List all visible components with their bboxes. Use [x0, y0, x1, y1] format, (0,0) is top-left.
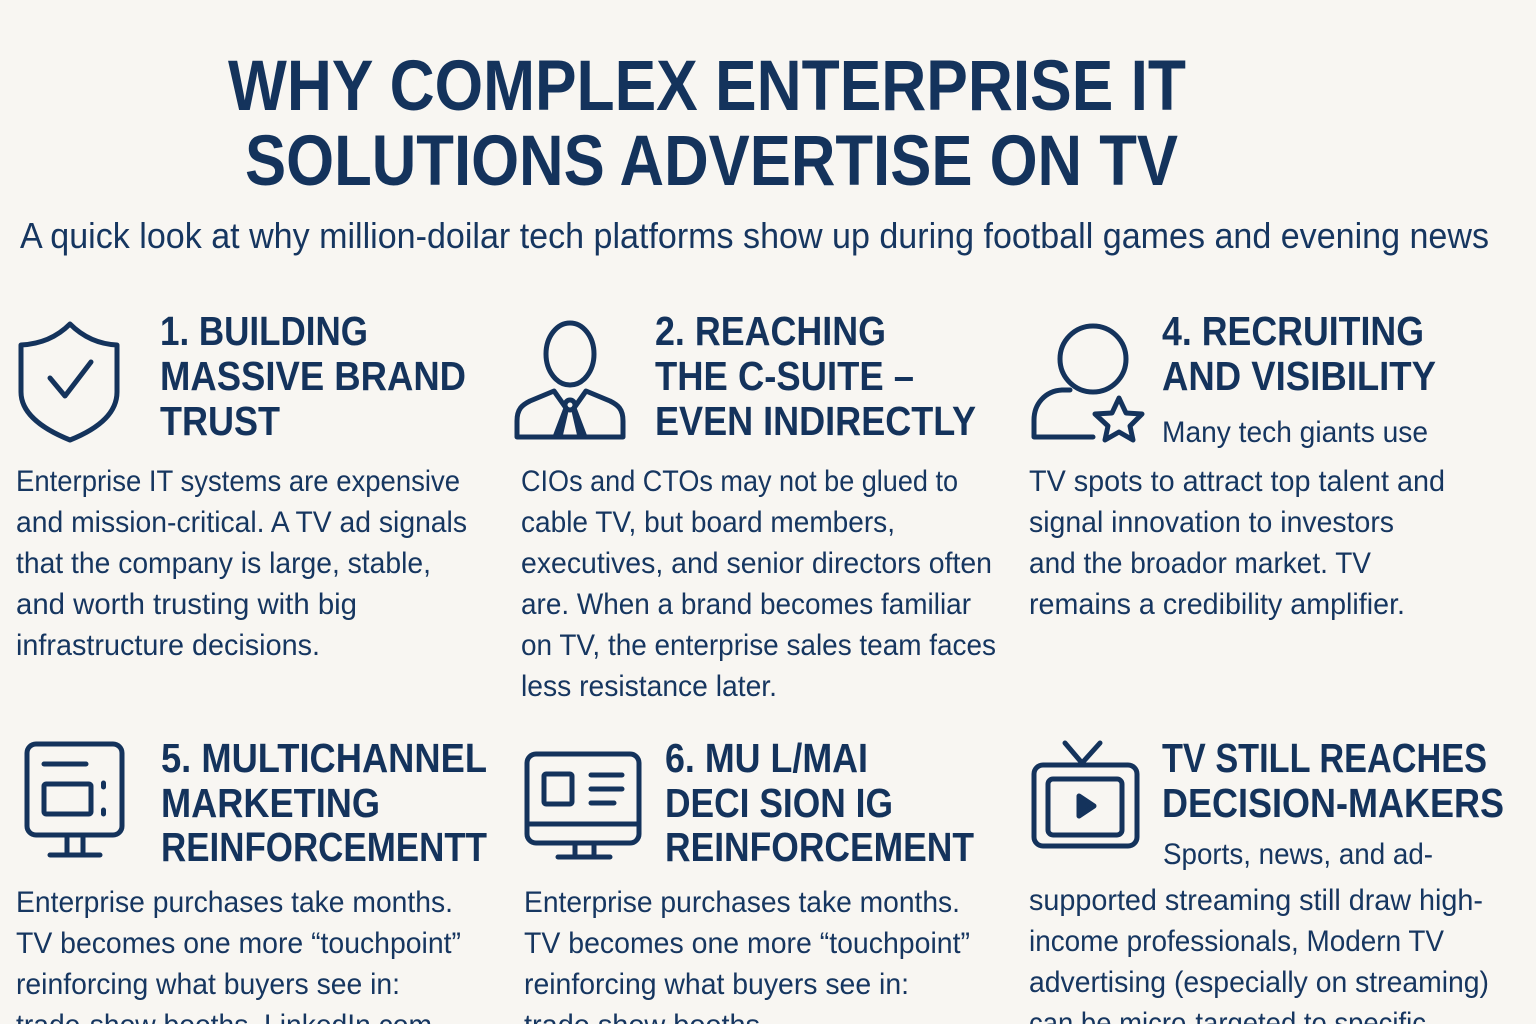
subtitle: A quick look at why million-doilar tech platforms show up during football games and evening news — [20, 215, 1489, 256]
body text 1: infrastructure decisions. — [16, 629, 320, 662]
body text 5: TV becomes one more “touchpoint” — [16, 927, 461, 960]
icon: tv with play button — [1034, 743, 1137, 846]
body text tv: income professionals, Modern TV — [1029, 925, 1444, 958]
heading 5: 5. MULTICHANNEL — [161, 735, 487, 781]
body text tv: supported streaming still draw high- — [1029, 884, 1483, 917]
body text 5: reinforcing what buyers see in: — [16, 968, 400, 1001]
heading 4 — [1162, 308, 1436, 399]
title — [228, 47, 1186, 201]
body text 4 — [1029, 416, 1445, 621]
heading 5 — [161, 735, 487, 870]
heading 2 — [655, 308, 976, 444]
panel: 5 multichannel marketing reinforcement — [16, 735, 487, 1024]
heading tv — [1162, 735, 1504, 826]
heading 2: EVEN INDIRECTLY — [655, 398, 976, 444]
heading 2: 2. REACHING — [655, 308, 886, 354]
body text 1: that the company is large, stable, — [16, 547, 431, 580]
icon: monitor with layout — [27, 744, 122, 855]
body text 2: on TV, the enterprise sales team faces — [521, 629, 996, 662]
panel: tv still reaches decision-makers — [1029, 735, 1504, 1024]
body text 6: reinforcing what buyers see in: — [524, 968, 909, 1001]
body text 4: TV spots to attract top talent and — [1029, 465, 1445, 498]
panel: 2 reaching the c-suite — [517, 308, 996, 703]
body text 4: remains a credibility amplifier. — [1029, 588, 1405, 621]
body text 4: and the broador market. TV — [1029, 547, 1371, 580]
body text 1: and worth trusting with big — [16, 588, 357, 621]
icon: executive with tie — [517, 323, 623, 437]
heading 6: REINFORCEMENT — [665, 824, 974, 870]
body text 6 — [524, 886, 970, 1024]
body text 2: CIOs and CTOs may not be glued to — [521, 465, 958, 498]
icon: person with star — [1034, 326, 1142, 440]
body text 2 — [521, 465, 996, 703]
heading 4: 4. RECRUITING — [1162, 308, 1424, 354]
panel: 4 recruiting and visibility — [1029, 308, 1445, 621]
body text tv: Sports, news, and ad- — [1163, 838, 1433, 871]
heading 6 — [665, 735, 974, 870]
body text tv — [1029, 838, 1489, 1024]
body text tv: advertising (especially on streaming) — [1029, 966, 1489, 999]
heading 1 — [160, 308, 466, 444]
body text 2: are. When a brand becomes familiar — [521, 588, 971, 621]
heading 1: TRUST — [160, 398, 280, 444]
heading 5: REINFORCEMENTT — [161, 824, 487, 870]
heading 1: 1. BUILDING — [160, 308, 368, 354]
body text 2: cable TV, but board members, — [521, 506, 895, 539]
heading 6: DECI SION IG — [665, 780, 893, 826]
body text 6: Enterprise purchases take months. — [524, 886, 960, 919]
icon: shield with check — [21, 324, 117, 440]
body text 4: Many tech giants use — [1162, 416, 1428, 449]
heading 1: MASSIVE BRAND — [160, 353, 466, 399]
body text 6: TV becomes one more “touchpoint” — [524, 927, 970, 960]
body text 5: Enterprise purchases take months. — [16, 886, 453, 919]
title: SOLUTIONS ADVERTISE ON TV — [245, 122, 1178, 201]
panel: 6 decision reinforcement — [524, 735, 974, 1024]
body text 1 — [16, 465, 467, 662]
body text 4: signal innovation to investors — [1029, 506, 1394, 539]
body text 1: and mission-critical. A TV ad signals — [16, 506, 467, 539]
body text 2: executives, and senior directors often — [521, 547, 992, 580]
body text 5 — [16, 886, 461, 1024]
body text 1: Enterprise IT systems are expensive — [16, 465, 460, 498]
heading 2: THE C-SUITE – — [655, 353, 914, 399]
heading 4: AND VISIBILITY — [1162, 353, 1436, 399]
icon: desktop with content — [527, 754, 639, 857]
body text 2: less resistance later. — [521, 670, 777, 703]
heading 5: MARKETING — [161, 780, 380, 826]
heading 6: 6. MU L/MAI — [665, 735, 868, 781]
panel: 1 building massive brand trust — [16, 308, 467, 662]
title: WHY COMPLEX ENTERPRISE IT — [228, 47, 1186, 126]
